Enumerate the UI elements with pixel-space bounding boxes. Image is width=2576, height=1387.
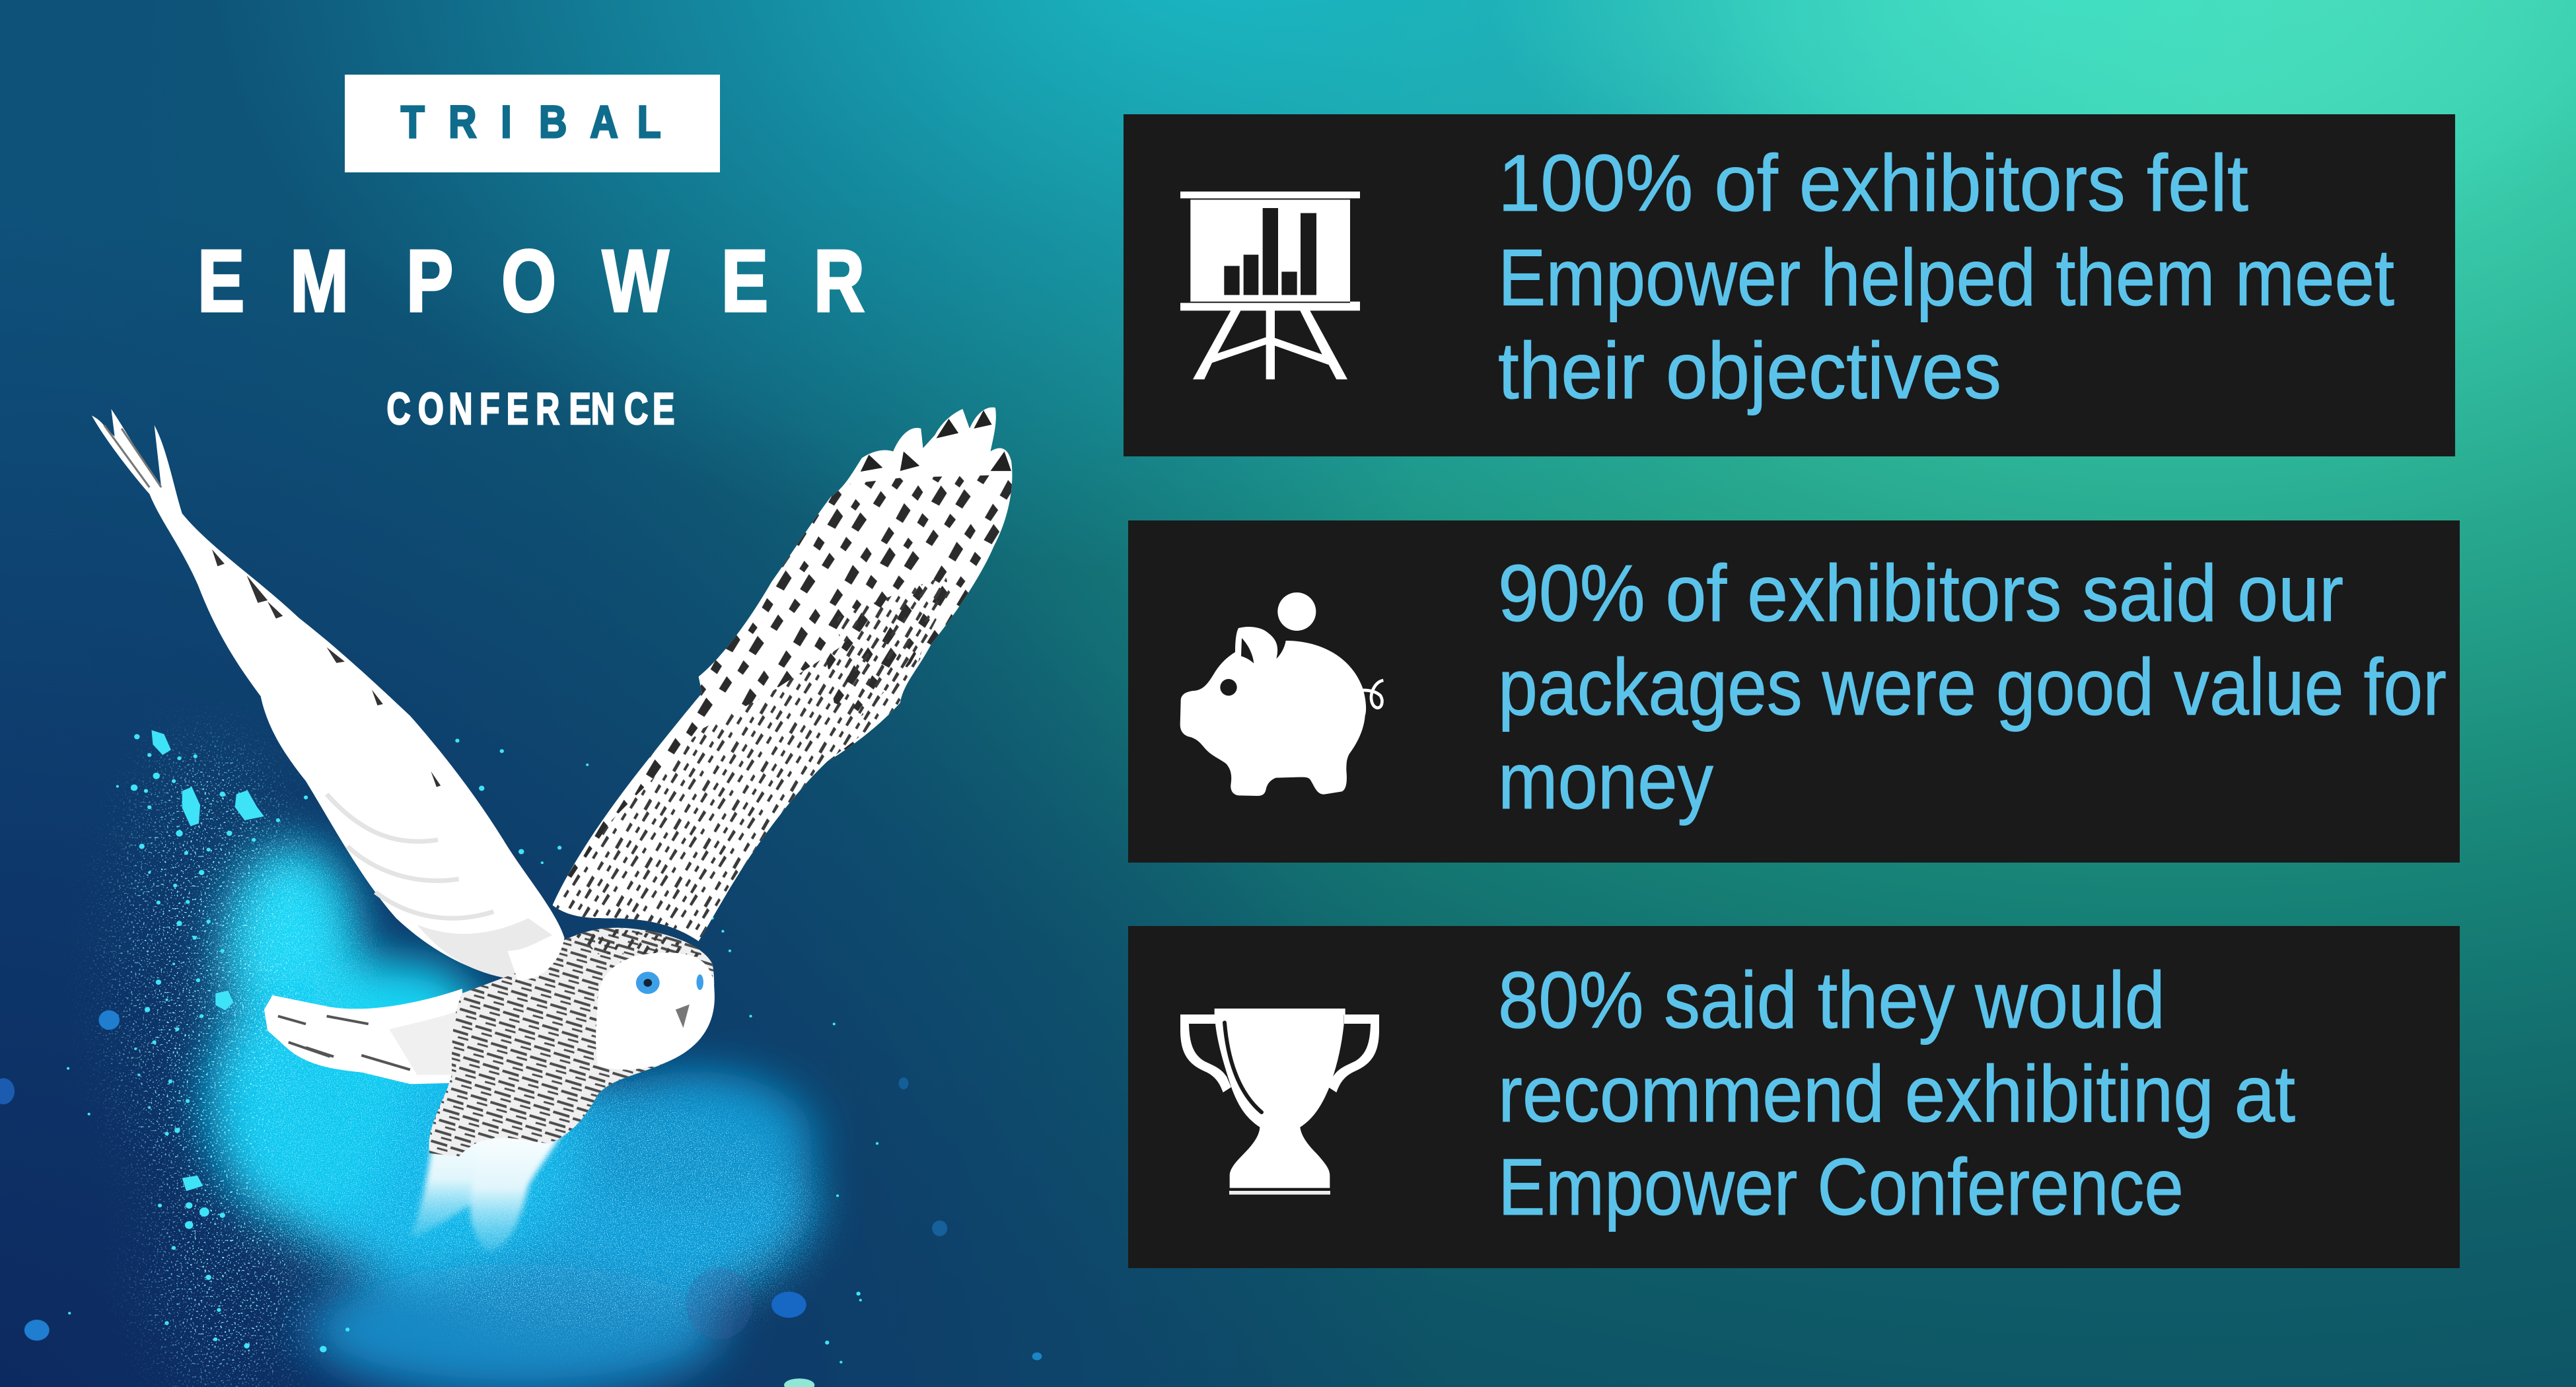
- CONFERENCE subheading: CONFERENCE: [386, 384, 674, 434]
- owl eyes: [636, 972, 703, 994]
- powder grain: [209, 834, 813, 1336]
- soft powder glow: [209, 846, 813, 1387]
- owl far wing: [92, 409, 564, 980]
- statement text: packages were good value for: [1498, 642, 2447, 732]
- panel background: [1128, 926, 2460, 1268]
- owl face: [596, 952, 715, 1070]
- statement text: Empower Conference: [1498, 1142, 2184, 1232]
- owl beak: [676, 1005, 690, 1028]
- icon: piggy bank with coin: [1180, 592, 1383, 796]
- statement text: 90% of exhibitors said our: [1498, 548, 2343, 638]
- powder cloud: [0, 730, 1042, 1387]
- statement text: 100% of exhibitors felt: [1498, 138, 2248, 228]
- snowy owl in flight: [92, 408, 1028, 1252]
- statement text: Empower helped them meet: [1498, 232, 2394, 322]
- icon: presentation board chart: [1180, 192, 1360, 379]
- owl body and head: [424, 925, 716, 1160]
- panel: exhibitor objectives: [1124, 114, 2455, 456]
- statement text: money: [1498, 736, 1713, 826]
- title block: [197, 75, 865, 434]
- fine powder sparks: [118, 742, 306, 1387]
- statement text: their objectives: [1498, 326, 2001, 415]
- TRIBAL badge: [345, 75, 720, 172]
- statement text: 80% said they would: [1498, 955, 2165, 1045]
- panel background: [1128, 520, 2460, 863]
- owl rear wing: [264, 989, 464, 1084]
- owl near wing with dark markings: [549, 408, 1028, 944]
- panel: recommendation: [1128, 926, 2460, 1268]
- panel background: [1124, 114, 2455, 456]
- out of focus blobs: [0, 1011, 1042, 1387]
- icon: trophy: [1180, 1009, 1379, 1195]
- powder speckles: [67, 730, 878, 1363]
- EMPOWER heading: EMPOWER: [197, 232, 865, 330]
- panel: value for money: [1128, 520, 2469, 863]
- owl legs: [410, 1121, 567, 1252]
- TRIBAL badge: TRIBAL: [401, 96, 661, 147]
- statement text: recommend exhibiting at: [1498, 1049, 2295, 1139]
